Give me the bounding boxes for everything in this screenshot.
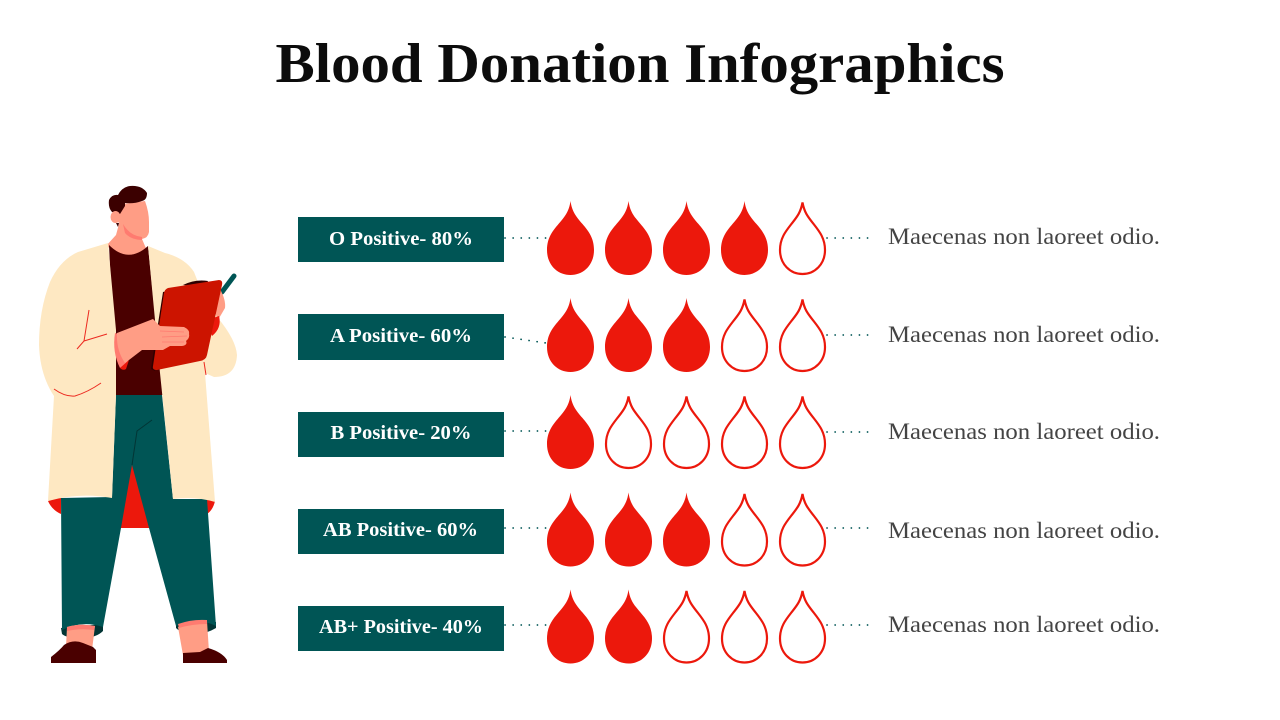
description: Maecenas non laoreet odio. <box>888 322 1160 348</box>
description: Maecenas non laoreet odio. <box>888 419 1160 445</box>
connector dots right <box>827 624 870 626</box>
connector dots right <box>827 334 870 336</box>
label <box>298 509 504 554</box>
description: Maecenas non laoreet odio. <box>888 224 1160 250</box>
connector dots left <box>505 527 546 529</box>
title: Blood Donation Infographics <box>276 33 1004 95</box>
connector dots right <box>827 237 870 239</box>
jaw shadow <box>123 224 142 240</box>
coat red lining and hem <box>48 460 215 528</box>
clipboard <box>153 280 222 370</box>
hair below ear <box>116 223 119 227</box>
ear <box>110 211 120 223</box>
ankle shadow <box>67 620 207 631</box>
trouser cuffs <box>61 622 216 638</box>
row 2: A Positive <box>298 298 1160 372</box>
coat right panel <box>148 246 237 502</box>
drops <box>547 298 825 372</box>
row 3: B Positive: B Positive- 20% <box>330 423 472 444</box>
label <box>298 412 504 457</box>
label <box>298 314 504 360</box>
left sleeve cuff <box>120 360 129 370</box>
connector dots left <box>505 624 546 626</box>
coat seam lines <box>54 310 206 396</box>
row 3: B Positive <box>298 395 1160 469</box>
drops <box>547 590 825 664</box>
right sleeve cuff <box>207 316 220 336</box>
clipboard back <box>151 280 208 371</box>
finger lines <box>160 331 187 342</box>
trousers <box>61 395 216 630</box>
ankles <box>66 621 209 655</box>
row 1: O Positive <box>298 201 1160 275</box>
description: Maecenas non laoreet odio. <box>888 518 1160 544</box>
hair <box>109 186 147 214</box>
pen <box>222 276 234 292</box>
row 1: O Positive: O Positive- 80% <box>329 229 473 250</box>
connector dots right <box>827 527 870 529</box>
arm and left hand <box>117 319 189 363</box>
illustration: doctor holding clipboard <box>39 186 237 663</box>
label <box>298 217 504 262</box>
row 2: A Positive: A Positive- 60% <box>330 326 472 347</box>
shirt <box>109 245 163 395</box>
trouser crease <box>132 420 152 465</box>
drops <box>547 395 825 469</box>
connector dots left <box>505 337 546 343</box>
label <box>298 606 504 651</box>
coat left panel <box>39 243 116 501</box>
wrist shadow <box>114 333 128 368</box>
row 4: AB Positive <box>298 492 1160 566</box>
description: Maecenas non laoreet odio. <box>888 612 1160 638</box>
right hand <box>214 289 225 320</box>
neck and face <box>106 201 149 258</box>
connector dots right <box>827 431 870 433</box>
shoes <box>51 641 227 663</box>
row 5: AB+ Positive <box>298 590 1160 664</box>
connector dots left <box>505 430 546 432</box>
drops <box>547 492 825 566</box>
row 5: AB+ Positive: AB+ Positive- 40% <box>319 617 483 638</box>
drops <box>547 201 825 275</box>
row 4: AB Positive: AB Positive- 60% <box>323 520 478 541</box>
connector dots left <box>505 237 594 239</box>
